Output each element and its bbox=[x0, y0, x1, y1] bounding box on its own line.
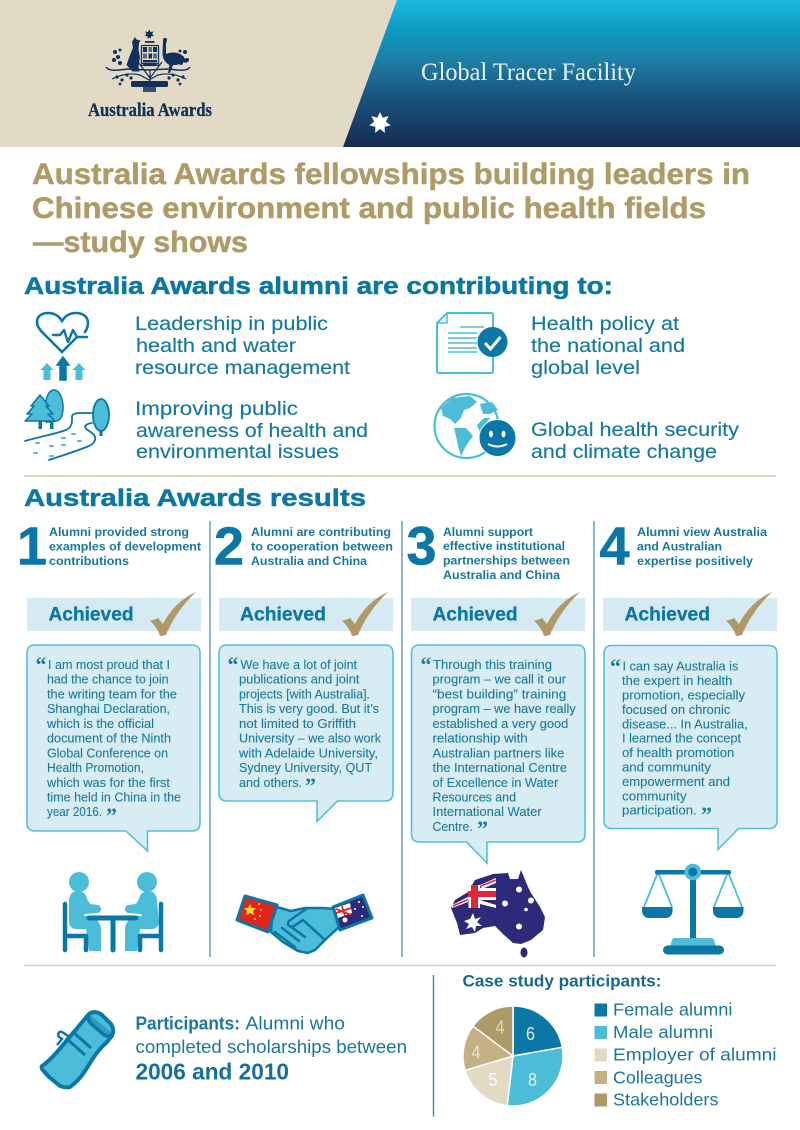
quote 3: Centre. bbox=[432, 820, 473, 834]
quote 4: participation. bbox=[622, 804, 697, 818]
result 3 heading: Alumni support bbox=[443, 525, 533, 539]
quote 1: document of the Ninth bbox=[47, 732, 171, 746]
coat of arms emblem bbox=[106, 30, 190, 92]
text: health policy: global level bbox=[531, 357, 640, 379]
pie chart: 6 bbox=[526, 1024, 535, 1044]
quote 4: of health promotion bbox=[622, 746, 734, 760]
quote 1: had the chance to join bbox=[47, 673, 168, 687]
quote 2: ” bbox=[305, 773, 316, 798]
result 4 heading: and Australian bbox=[637, 540, 722, 554]
achieved badge 4 bbox=[603, 592, 777, 636]
quote 1: Shanghai Declaration, bbox=[47, 702, 170, 716]
achieved badge 3 bbox=[411, 592, 585, 636]
result 3 heading bbox=[443, 525, 570, 582]
legend: Male alumni bbox=[613, 1022, 713, 1042]
icon: rolled scroll diploma bbox=[42, 1012, 113, 1087]
pie chart: 8 bbox=[528, 1070, 537, 1090]
quote 1: which is the official bbox=[46, 717, 154, 731]
quote 1: year 2016. bbox=[47, 805, 102, 819]
quote 4: I learned the concept bbox=[622, 732, 742, 746]
text: public awareness: environmental issues bbox=[136, 441, 339, 463]
quote 3: program – we call it our bbox=[432, 673, 566, 687]
pie chart: 5 bbox=[488, 1070, 498, 1090]
icon: federation star bbox=[369, 112, 391, 133]
legend: Employer of alumni bbox=[613, 1045, 776, 1065]
text: leadership bbox=[135, 313, 351, 379]
achieved badge 4: Achieved bbox=[624, 604, 710, 626]
quote 4: disease... In Australia, bbox=[622, 717, 748, 731]
quote 4: “ bbox=[610, 654, 621, 679]
icon: two people at a table bbox=[65, 872, 161, 951]
title: Australia Awards fellowships building leaders in bbox=[32, 158, 750, 191]
quote 3: program – we have really bbox=[432, 702, 576, 716]
heading: results: Australia Awards results bbox=[24, 485, 366, 512]
text: leadership: health and water bbox=[136, 335, 297, 357]
text: health policy: the national and bbox=[531, 335, 685, 357]
result 2 heading: to cooperation between bbox=[251, 540, 393, 554]
text: participants bbox=[136, 1014, 407, 1084]
text: leadership: resource management bbox=[135, 357, 351, 379]
icon: globe with smile bbox=[434, 394, 516, 458]
quote 1: which was for the first bbox=[46, 776, 170, 790]
number 3: 3 bbox=[406, 516, 437, 576]
quote 1: time held in China in the bbox=[47, 790, 181, 804]
title bbox=[32, 158, 750, 259]
quote 1: “ bbox=[36, 652, 46, 677]
quote 1 bbox=[27, 645, 200, 851]
result 3 heading: effective institutional bbox=[443, 539, 565, 553]
result 2 heading: Alumni are contributing bbox=[251, 525, 391, 539]
quote 2 bbox=[219, 645, 393, 822]
quote 4: the expert in health bbox=[622, 674, 732, 688]
quote 3: “best building” training bbox=[432, 687, 566, 701]
quote 1: the writing team for the bbox=[47, 687, 177, 701]
quote 3: Through this training bbox=[433, 658, 552, 672]
quote 4: promotion, especially bbox=[622, 688, 746, 702]
quote 3: relationship with bbox=[432, 732, 528, 746]
quote 3: established a very good bbox=[432, 717, 568, 731]
quote 2: projects [with Australia]. bbox=[239, 687, 370, 701]
result 3 heading: Australia and China bbox=[443, 568, 560, 582]
quote 3: Australian partners like bbox=[432, 746, 564, 760]
number 2: 2 bbox=[214, 516, 244, 576]
result 4 heading bbox=[637, 525, 767, 568]
quote 4 bbox=[604, 646, 777, 850]
result 1 heading: Alumni provided strong bbox=[49, 525, 189, 539]
icon: heart with rising arrows bbox=[37, 313, 88, 380]
quote 2: Sydney University, QUT bbox=[239, 761, 372, 775]
text: participants: completed scholarships between bbox=[136, 1037, 407, 1057]
result 4 heading: Alumni view Australia bbox=[637, 525, 767, 539]
text: health policy: Health policy at bbox=[531, 313, 680, 335]
quote 4: focused on chronic bbox=[622, 703, 730, 717]
quote 2: with Adelaide University, bbox=[238, 746, 378, 760]
quote 1: Global Conference on bbox=[47, 746, 168, 760]
result 2 heading bbox=[251, 525, 393, 568]
result 3 heading: partnerships between bbox=[443, 554, 570, 568]
quote 3: “ bbox=[420, 652, 432, 677]
quote 1: ” bbox=[106, 803, 117, 828]
quote 4: community bbox=[622, 789, 687, 803]
quote 4: ” bbox=[701, 802, 712, 827]
achieved badge 2: Achieved bbox=[240, 604, 326, 626]
quote 2: and others. bbox=[239, 776, 302, 790]
legend bbox=[594, 1000, 776, 1110]
pie chart: 4 bbox=[496, 1018, 504, 1038]
achieved badge 3: Achieved bbox=[432, 604, 518, 626]
wordmark: Australia Awards bbox=[88, 100, 212, 121]
text: health security bbox=[531, 419, 739, 463]
quote 2: “ bbox=[228, 652, 238, 677]
icon: balance scales bbox=[642, 864, 744, 954]
quote 3: of Excellence in Water bbox=[432, 776, 558, 790]
legend: Stakeholders bbox=[613, 1090, 719, 1110]
quote 4: I can say Australia is bbox=[622, 660, 738, 674]
text: leadership: Leadership in public bbox=[135, 313, 328, 335]
panel: result 1 bbox=[17, 516, 201, 951]
text: participants: Participants: bbox=[136, 1014, 240, 1034]
quote 4: and community bbox=[622, 760, 712, 774]
icon: handshake with flags bbox=[237, 895, 372, 953]
number 4: 4 bbox=[600, 516, 630, 576]
quote 3 bbox=[412, 645, 585, 863]
text: public awareness: Improving public bbox=[135, 398, 298, 420]
result 1 heading: examples of development bbox=[49, 540, 201, 554]
quote 3: Resources and bbox=[432, 790, 516, 804]
title: —study shows bbox=[33, 226, 248, 259]
quote 2: publications and joint bbox=[239, 673, 360, 687]
icon: policy document bbox=[437, 313, 508, 373]
quote 1: Health Promotion, bbox=[47, 761, 144, 775]
quote 2: This is very good. But it’s bbox=[239, 702, 379, 716]
number 1: 1 bbox=[17, 516, 47, 576]
title: Chinese environment and public health fields bbox=[32, 192, 706, 225]
text: health security: Global health security bbox=[531, 419, 739, 441]
quote 2: We have a lot of joint bbox=[240, 658, 357, 672]
text: public awareness bbox=[135, 398, 368, 463]
achieved badge 1 bbox=[27, 592, 201, 636]
result 4 heading: expertise positively bbox=[637, 554, 753, 568]
result 1 heading bbox=[49, 525, 201, 568]
quote 3: International Water bbox=[432, 805, 542, 819]
heading: contributing: Australia Awards alumni are contributing to: bbox=[24, 273, 613, 300]
icon: Australia map with flag bbox=[451, 870, 545, 958]
pie chart: 4 bbox=[472, 1042, 480, 1062]
legend: Female alumni bbox=[613, 1000, 732, 1020]
quote 1: I am most proud that I bbox=[48, 658, 170, 672]
quote 2: University – we also work bbox=[239, 732, 382, 746]
text: health security: and climate change bbox=[531, 441, 717, 463]
panel: result 2 bbox=[214, 516, 393, 953]
legend: Colleagues bbox=[613, 1067, 703, 1087]
pie chart bbox=[463, 1006, 563, 1106]
quote 3: the International Centre bbox=[432, 761, 567, 775]
text: public awareness: awareness of health and bbox=[136, 420, 368, 442]
icon: trees and river bbox=[25, 390, 109, 460]
quote 2: not limited to Griffith bbox=[239, 717, 356, 731]
heading: case study participants: Case study participants: bbox=[462, 972, 662, 991]
quote 4: empowerment and bbox=[622, 775, 730, 789]
text: health policy bbox=[531, 313, 685, 379]
banner title: Global Tracer Facility bbox=[421, 59, 636, 86]
result 2 heading: Australia and China bbox=[251, 554, 367, 568]
result 1 heading: contributions bbox=[49, 554, 129, 568]
achieved badge 2 bbox=[219, 592, 393, 636]
header banner bbox=[0, 0, 800, 147]
text: participants: 2006 and 2010 bbox=[136, 1058, 289, 1084]
quote 3: ” bbox=[477, 816, 488, 841]
achieved badge 1: Achieved bbox=[48, 604, 134, 626]
text: participants: Alumni who bbox=[246, 1014, 345, 1034]
panel: result 4 bbox=[600, 516, 777, 954]
panel: result 3 bbox=[406, 516, 585, 958]
